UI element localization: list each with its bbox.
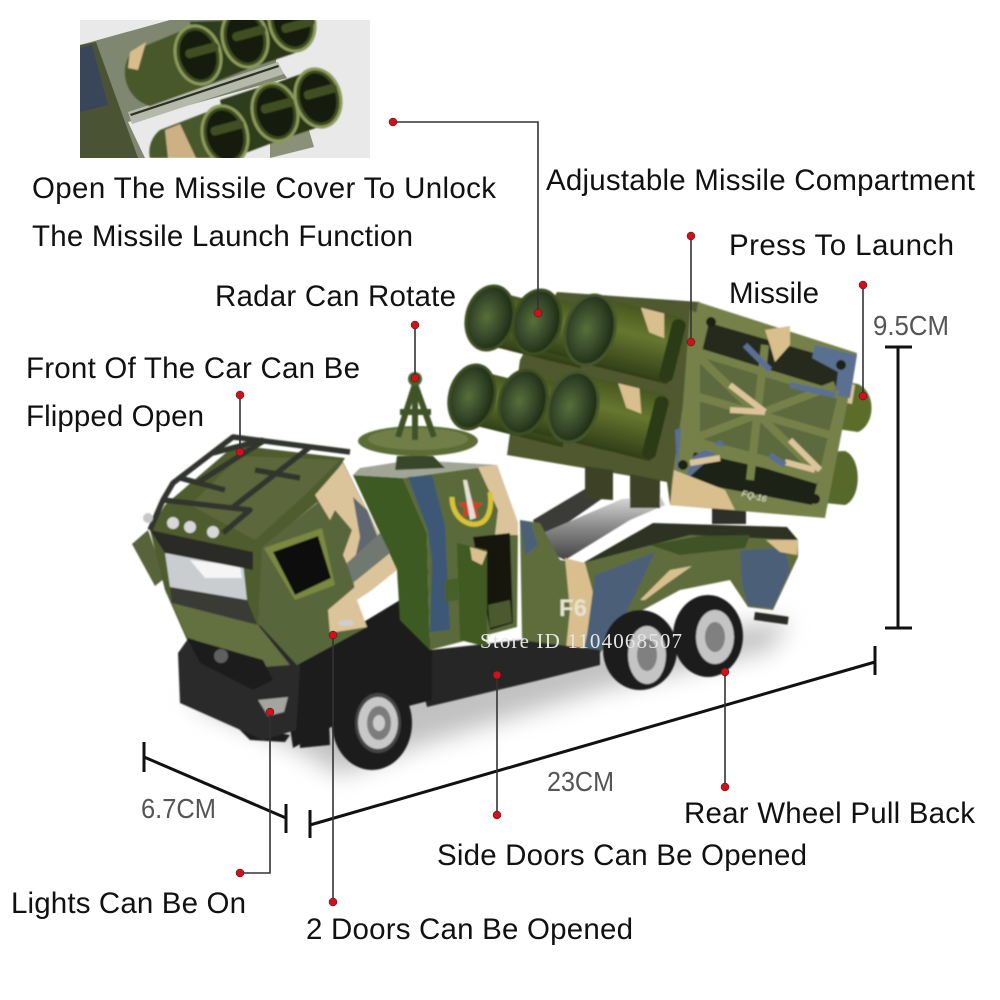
inset photo: missile cover detail: [80, 20, 370, 158]
dimension: length 23CM: [310, 646, 875, 838]
open door: [258, 462, 397, 665]
bumper: [178, 615, 300, 740]
missile tubes: [440, 279, 688, 465]
feature labels: Press To Launch: [729, 229, 954, 262]
dimension labels: 23CM: [547, 766, 614, 797]
dimension labels: 9.5CM: [873, 310, 949, 341]
rear wheels: [603, 595, 743, 690]
dimension labels: 6.7CM: [141, 793, 216, 824]
feature labels: Missile: [729, 277, 819, 310]
feature labels: Rear Wheel Pull Back: [684, 797, 975, 830]
truck bed: F6: [559, 595, 587, 622]
rear missile tips: [815, 380, 872, 505]
roof lights: [143, 513, 153, 523]
chassis and fuel tank: [235, 600, 600, 748]
roof rack: [150, 437, 350, 533]
dimension: width 6.7CM: [144, 742, 286, 833]
feature labels: 2 Doors Can Be Opened: [306, 913, 633, 946]
cab roof and front: [150, 445, 345, 640]
dimension: height 9.5CM: [885, 347, 912, 628]
truck bed: [520, 520, 798, 665]
watermark: store id: Store ID 1104068507: [480, 629, 682, 653]
feature labels: Lights Can Be On: [11, 887, 246, 920]
front wheel: [332, 676, 412, 770]
feature labels: Side Doors Can Be Opened: [437, 839, 807, 872]
lower front panel: [172, 603, 290, 667]
launcher frame: FQ-16: [741, 488, 769, 504]
feature labels: Open The Missile Cover To Unlock: [32, 172, 496, 205]
cab: [132, 437, 397, 748]
feature labels: Front Of The Car Can Be: [26, 352, 360, 385]
feature labels: [11, 164, 975, 946]
emblem: [452, 480, 491, 524]
truck: [132, 279, 872, 770]
feature labels: Flipped Open: [26, 400, 204, 433]
grille: [187, 638, 273, 690]
wing mirror: [132, 530, 165, 586]
feature labels: The Missile Launch Function: [32, 220, 413, 253]
rear unit: cabin with door: [353, 460, 518, 650]
ground shadow: [185, 620, 790, 775]
launcher frame: [670, 302, 857, 518]
feature labels: Adjustable Missile Compartment: [546, 164, 975, 197]
windshield: [165, 553, 247, 600]
feature labels: Radar Can Rotate: [215, 280, 456, 313]
callout leader lines and dots: [236, 118, 867, 906]
hydraulic cylinders: [533, 466, 746, 560]
radar dish: [358, 372, 478, 470]
launcher box side: [507, 292, 700, 505]
dimension labels: [141, 310, 949, 824]
